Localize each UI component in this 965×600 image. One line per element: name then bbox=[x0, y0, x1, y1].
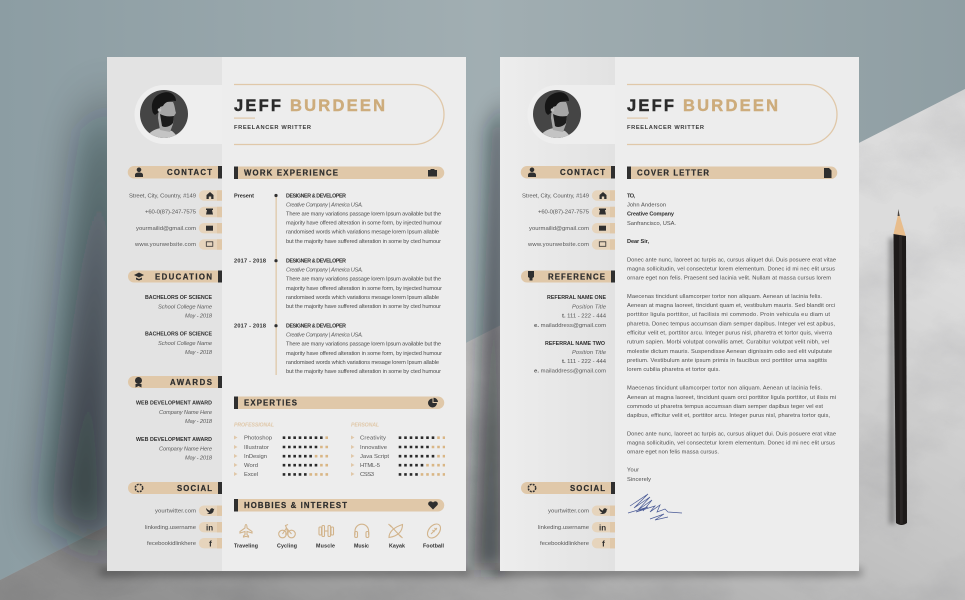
letter paragraph 4: Donec ante nunc, laoreet ac turpis ac, cursus aliquet dui. Duis posuere erat vitae bbox=[627, 432, 836, 438]
icon: home bbox=[600, 192, 606, 199]
social heading bbox=[521, 482, 615, 494]
skills: professional: Photoshop bbox=[244, 436, 273, 442]
icon: headphones bbox=[355, 524, 369, 538]
social list: fecebookidlinkhere bbox=[147, 541, 197, 547]
skills: professional: Illustrator bbox=[244, 445, 269, 451]
signature bbox=[628, 494, 682, 520]
icon: phone bbox=[599, 208, 606, 214]
job 3: Creative Company | America USA. bbox=[286, 333, 363, 339]
social list: yourtwitter.com bbox=[155, 508, 196, 514]
social list: fecebookidlinkhere bbox=[540, 541, 590, 547]
letter paragraph 2: efficitur velit et, porttitor arcu. Integer purus nisl, pharetra et tortor quis, viverra bbox=[627, 330, 833, 336]
icon: pie chart bbox=[428, 398, 438, 408]
contact list: yourmailid@gmail.com bbox=[529, 226, 589, 232]
hobbies icons bbox=[234, 522, 445, 550]
job 3: 2017 - 2018 bbox=[234, 324, 266, 330]
skills: personal: PERSONAL bbox=[351, 422, 379, 428]
icon: football bbox=[425, 522, 443, 540]
icon: pen nib bbox=[528, 271, 534, 280]
education list: BACHELORS OF SCIENCE bbox=[145, 295, 212, 301]
job 1: There are many variations passage lorem Ipsum available but the bbox=[286, 212, 441, 218]
education list bbox=[145, 295, 213, 356]
skills: professional: Excel bbox=[244, 472, 258, 478]
experties heading: EXPERTIES bbox=[244, 399, 297, 408]
panel: cover letter page bbox=[500, 57, 859, 571]
letter sign-off: Your bbox=[627, 468, 639, 474]
letter paragraph 3 bbox=[627, 386, 836, 419]
hobby labels: Traveling bbox=[234, 544, 258, 550]
icon: share ring bbox=[135, 484, 143, 492]
skills: personal: CSS3 bbox=[360, 472, 375, 478]
education heading: EDUCATION bbox=[155, 272, 212, 282]
letter paragraph 2: pretium. Vestibulum ante ipsum primis in faucibus orci porttitor urna sagittis bbox=[627, 358, 827, 364]
letter paragraph 4: ornare eget non felis massa cursus. bbox=[627, 450, 719, 456]
letter address block: Dear Sir, bbox=[627, 239, 649, 245]
skills: professional: InDesign bbox=[244, 454, 267, 460]
social list: linkeding.username bbox=[145, 525, 197, 531]
letter paragraph 3: dapibus, efficitur velit et, porttitor arcu. Integer purus nisl, pharetra tortor quis, bbox=[627, 413, 830, 419]
icon: briefcase bbox=[428, 169, 437, 176]
icon: person bbox=[135, 168, 143, 177]
awards list: Company Name Here bbox=[159, 410, 212, 416]
contact list bbox=[522, 190, 615, 250]
letter sign-off bbox=[627, 468, 651, 483]
skills: personal: Creativity bbox=[360, 436, 386, 442]
hobby labels: Cycling bbox=[277, 544, 297, 550]
icon: bicycle bbox=[279, 524, 295, 538]
icon: phone bbox=[206, 208, 213, 214]
reference heading: REFERENCE bbox=[548, 272, 605, 282]
letter sign-off: Sincerely bbox=[627, 477, 651, 483]
social heading bbox=[128, 482, 222, 494]
education list: School College Name bbox=[158, 341, 212, 347]
skill dots bbox=[399, 438, 445, 474]
icon: graduation cap bbox=[134, 272, 144, 280]
social list: yourtwitter.com bbox=[548, 508, 589, 514]
header outline with name: BURDEEN bbox=[683, 97, 778, 115]
icon: heart bbox=[428, 501, 438, 510]
job 3: DESIGNER & DEVELOPER bbox=[286, 324, 346, 330]
reference list: REFERRAL NAME ONE bbox=[547, 295, 606, 301]
page shadows bbox=[50, 90, 862, 576]
icon: mail bbox=[206, 226, 213, 231]
name: JEFF bbox=[627, 97, 674, 115]
skills: professional: PROFESSIONAL bbox=[234, 422, 274, 428]
contact list bbox=[129, 190, 222, 250]
icon: award ribbon bbox=[135, 377, 142, 388]
contact list: Street, City, Country, #149 bbox=[522, 194, 589, 200]
contact list: www.yourwebsite.com bbox=[527, 242, 589, 248]
job 2: 2017 - 2018 bbox=[234, 259, 266, 265]
job 3: but the majority have suffered alteration in some by cted humour bbox=[286, 369, 441, 375]
letter address block: TO, bbox=[627, 193, 635, 199]
letter paragraph 3: commodo ut pharetra tempus accumsan diam semper dapibus teger vel est bbox=[627, 404, 823, 410]
reference list: e. mailaddress@gmail.com bbox=[534, 368, 606, 374]
pencil bbox=[889, 209, 907, 525]
icon: twitter bbox=[599, 508, 608, 514]
hobbies heading bbox=[234, 499, 444, 512]
letter paragraph 3: Maecenas tincidunt ullamcorper tortor non aliquam. Aenean ut lacinia felis. bbox=[627, 386, 822, 392]
letter address block: John Anderson bbox=[627, 202, 666, 208]
header outline with name bbox=[627, 84, 837, 144]
icon: airplane bbox=[240, 524, 252, 537]
letter address block: Sanfrancisco, USA. bbox=[627, 221, 676, 227]
job 3 bbox=[234, 324, 442, 375]
contact list: www.yourwebsite.com bbox=[134, 242, 196, 248]
job 3: randomised words which variations mesage lorem Ipsum allable bbox=[286, 360, 439, 366]
skill dots bbox=[283, 438, 328, 474]
avatar pill and photo bbox=[135, 85, 222, 144]
letter paragraph 4 bbox=[627, 432, 836, 456]
contact list: +60-0(87)-247-7575 bbox=[145, 210, 197, 216]
job 1: DESIGNER & DEVELOPER bbox=[286, 194, 346, 200]
letter address block bbox=[627, 193, 676, 245]
reference list: Position Title bbox=[572, 304, 606, 310]
skills: personal: Innovative bbox=[360, 445, 388, 451]
cover letter heading bbox=[627, 166, 837, 179]
icon: twitter bbox=[206, 508, 214, 514]
social list bbox=[145, 506, 222, 548]
work experience heading bbox=[234, 166, 444, 179]
awards list: Company Name Here bbox=[159, 446, 212, 452]
letter paragraph 3: Aenean at magna laoreet, tincidunt quam orci porttitor ligula porttitor, ut ilisis mi bbox=[627, 395, 836, 401]
letter paragraph 2: lorem cubilia pharetra et tortor quis. bbox=[627, 367, 720, 373]
icon: document bbox=[824, 168, 832, 178]
reference list: t. 111 - 222 - 444 bbox=[562, 359, 607, 365]
social heading: SOCIAL bbox=[177, 484, 212, 493]
experties heading bbox=[234, 396, 444, 409]
icon: facebook: f bbox=[602, 538, 605, 548]
skills: personal: Java Script bbox=[360, 454, 389, 460]
awards heading bbox=[128, 376, 222, 388]
letter paragraph 2: porttitor ligula porttitor, ut facilisis mi commodo. Proin vehicula eu diam ut bbox=[627, 312, 830, 318]
icon: home bbox=[206, 192, 214, 199]
reference list bbox=[534, 295, 607, 374]
experience timeline bbox=[234, 194, 442, 375]
job 2: DESIGNER & DEVELOPER bbox=[286, 259, 346, 265]
reference heading bbox=[521, 270, 615, 282]
letter paragraph 2: rutrum sapien. Morbi volutpat convallis amet. Curabitur volutpat velit nibh, vel bbox=[627, 340, 829, 346]
awards list: May - 2018 bbox=[185, 456, 213, 462]
reference list: REFERRAL NAME TWO bbox=[545, 341, 605, 347]
awards list: WEB DEVELOPMENT AWARD bbox=[136, 437, 212, 443]
contact heading bbox=[128, 166, 222, 178]
hobby labels bbox=[234, 544, 445, 550]
job 1: randomised words which variations mesage lorem Ipsum allable bbox=[286, 230, 439, 236]
icon: monitor bbox=[599, 242, 606, 246]
icon: dumbbell bbox=[319, 526, 334, 536]
job 1 bbox=[234, 194, 442, 245]
job 2: Creative Company | America USA. bbox=[286, 268, 363, 274]
letter paragraph 1: Donec ante nunc, laoreet ac turpis ac, cursus aliquet dui. Duis posuere erat vitae bbox=[627, 258, 836, 264]
social list: linkeding.username bbox=[538, 525, 590, 531]
awards heading: AWARDS bbox=[170, 378, 212, 387]
letter paragraph 2: pharetra. Donec tempus accumsan diam semper dapibus. Integer vel est apibus, bbox=[627, 322, 835, 328]
job title: FREELANCER WRITTER bbox=[627, 125, 704, 131]
hobby labels: Music bbox=[354, 544, 369, 550]
education list: BACHELORS OF SCIENCE bbox=[145, 332, 212, 338]
contact heading: CONTACT bbox=[560, 168, 605, 177]
job 1: majority have offered alteration in some form, by injected humour bbox=[286, 221, 442, 227]
icon: mail bbox=[599, 226, 606, 231]
work experience heading: WORK EXPERIENCE bbox=[244, 169, 338, 178]
header outline with name bbox=[234, 84, 444, 144]
contact list: yourmailid@gmail.com bbox=[136, 226, 196, 232]
hobbies heading: HOBBIES & INTEREST bbox=[244, 501, 347, 510]
social list bbox=[538, 506, 615, 548]
contact list: Street, City, Country, #149 bbox=[129, 194, 196, 200]
job 3: There are many variations passage lorem Ipsum available but the bbox=[286, 342, 441, 348]
icon: linkedin: in bbox=[599, 523, 606, 532]
icon: linkedin: in bbox=[206, 523, 213, 532]
job 1: Present bbox=[234, 194, 254, 200]
job 2 bbox=[234, 259, 442, 310]
job 1: Creative Company | America USA. bbox=[286, 202, 363, 208]
job 2: randomised words which variations mesage lorem Ipsum allable bbox=[286, 295, 439, 301]
skills: personal bbox=[351, 422, 445, 478]
avatar pill and photo bbox=[528, 85, 615, 144]
skills: professional bbox=[234, 422, 328, 478]
awards list bbox=[136, 400, 213, 462]
skills: professional: Word bbox=[244, 463, 258, 469]
skills: personal: HTML-5 bbox=[360, 463, 381, 469]
icon: monitor bbox=[206, 242, 213, 246]
reference list: t. 111 - 222 - 444 bbox=[562, 314, 607, 320]
letter paragraph 2: Aenean at magna laoreet, tincidunt quam et, vestibulum mauris. Sed blandit orci bbox=[627, 303, 835, 309]
awards list: May - 2018 bbox=[185, 419, 213, 425]
letter paragraph 1: magna sollicitudin, vel consectetur lorem elementum. Donec id mi nec elit ursus bbox=[627, 267, 835, 273]
job title: FREELANCER WRITTER bbox=[234, 125, 311, 131]
header outline with name: BURDEEN bbox=[290, 97, 385, 115]
education list: May - 2018 bbox=[185, 314, 213, 320]
hobby labels: Muscle bbox=[316, 544, 335, 550]
education list: May - 2018 bbox=[185, 350, 213, 356]
icon: facebook: f bbox=[209, 538, 212, 548]
job 2: majority have offered alteration in some form, by injected humour bbox=[286, 286, 442, 292]
letter paragraph 2: Maecenas tincidunt ullamcorper tortor non aliquam. Aenean ut lacinia felis. bbox=[627, 294, 822, 300]
awards list: WEB DEVELOPMENT AWARD bbox=[136, 400, 212, 406]
letter paragraph 2 bbox=[627, 294, 835, 373]
job 1: but the majority have suffered alteration in some by cted humour bbox=[286, 239, 441, 245]
contact heading bbox=[521, 166, 615, 178]
icon: share ring bbox=[528, 484, 536, 492]
social heading: SOCIAL bbox=[570, 484, 605, 493]
letter paragraph 4: magna sollicitudin, vel consectetur lorem elementum. Donec id mi nec elit ursus bbox=[627, 440, 835, 446]
job 2: There are many variations passage lorem Ipsum available but the bbox=[286, 277, 441, 283]
letter address block: Creative Company bbox=[627, 212, 675, 218]
hobby labels: Football bbox=[423, 544, 445, 550]
hobby labels: Kayak bbox=[389, 544, 405, 550]
name: JEFF bbox=[234, 97, 281, 115]
reference list: Position Title bbox=[572, 350, 606, 356]
job 3: majority have offered alteration in some form, by injected humour bbox=[286, 351, 442, 357]
job 2: but the majority have suffered alteration in some by cted humour bbox=[286, 304, 441, 310]
contact list: +60-0(87)-247-7575 bbox=[538, 210, 590, 216]
letter paragraph 1: ornare eget non felis. Praesent sed lacinia velit. Nullam at massa cursus lorem bbox=[627, 276, 831, 282]
icon: person bbox=[528, 168, 536, 177]
education heading bbox=[128, 270, 222, 282]
letter paragraph 1 bbox=[627, 258, 836, 282]
cover letter heading: COVER LETTER bbox=[637, 169, 709, 178]
contact heading: CONTACT bbox=[167, 168, 212, 177]
reference list: e. mailaddress@gmail.com bbox=[534, 323, 606, 329]
letter paragraph 2: molestie dictum mauris. Suspendisse Aenean dignissim odio sed elit vulputate bbox=[627, 349, 832, 355]
panel: resume page bbox=[107, 57, 466, 571]
icon: kayak bbox=[388, 524, 402, 538]
education list: School College Name bbox=[158, 304, 212, 310]
